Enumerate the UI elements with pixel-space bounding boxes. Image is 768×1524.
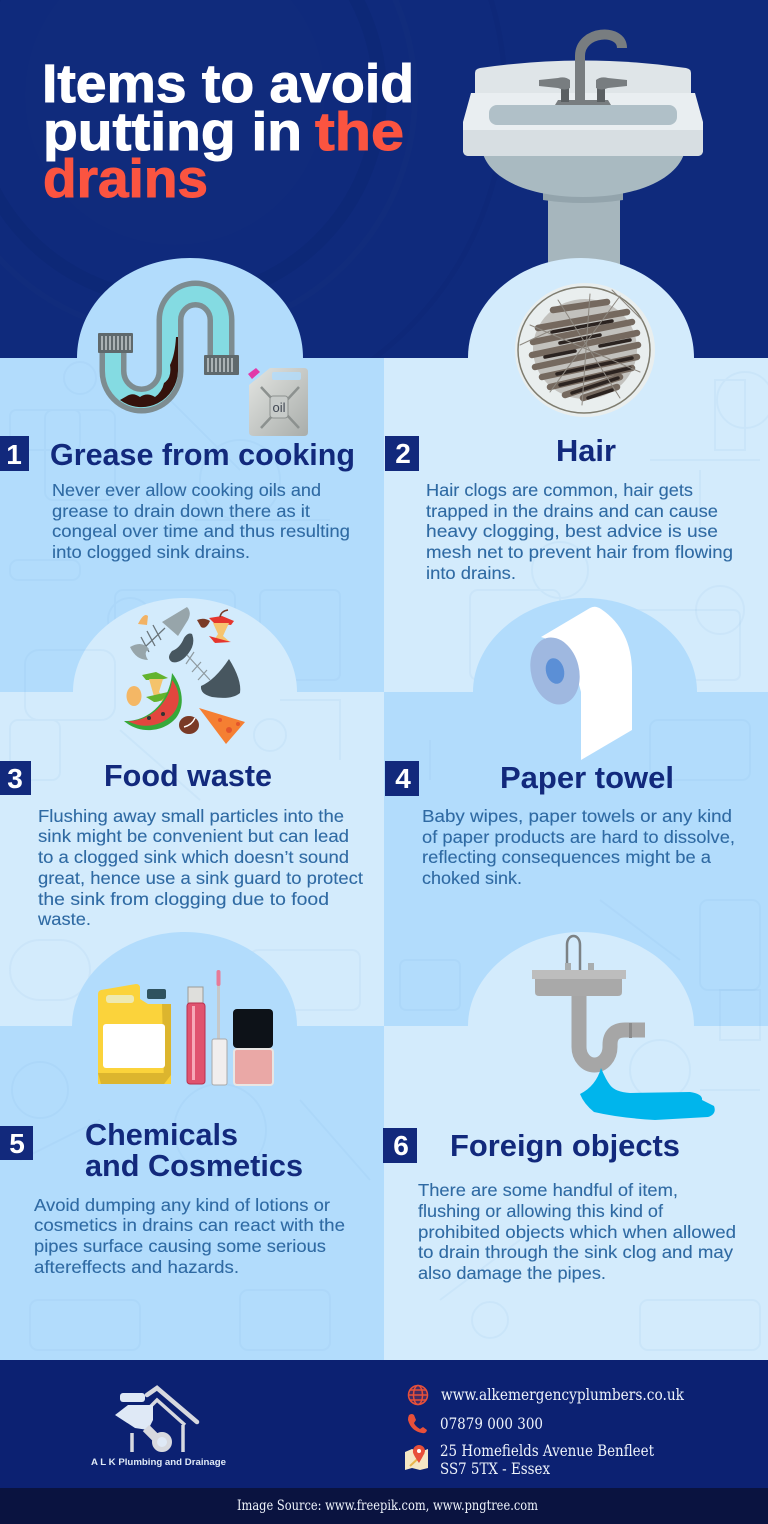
body text: There are some handful of item,: [418, 1180, 678, 1200]
heading: Hair: [556, 434, 616, 468]
image source bar: [0, 1488, 768, 1524]
body text: [426, 480, 733, 583]
body text: [34, 1195, 345, 1277]
panel: grease from cooking: [0, 258, 384, 692]
title: putting in: [43, 102, 302, 162]
body text: also damage the pipes.: [418, 1263, 606, 1283]
body text: Never ever allow cooking oils and: [52, 480, 321, 500]
body text: flushing or allowing this kind of: [418, 1201, 663, 1221]
number 6: [383, 1128, 417, 1163]
number 6: 6: [393, 1130, 409, 1161]
website: www.alkemergencyplumbers.co.uk: [441, 1386, 685, 1404]
number 5: 5: [9, 1128, 25, 1159]
heading: and Cosmetics: [85, 1149, 303, 1183]
logo: [91, 1388, 226, 1468]
panel: foreign objects: [383, 932, 768, 1360]
body text: heavy clogging, best advice is use: [426, 521, 718, 541]
panel: paper towel: [384, 586, 768, 1026]
number 1: 1: [6, 439, 22, 470]
body text: pipes surface causing some serious: [34, 1236, 326, 1256]
body text: [418, 1180, 736, 1283]
number 3: [0, 761, 31, 795]
icon: map pin: [405, 1445, 428, 1470]
body text: Flushing away small particles into the: [38, 806, 344, 826]
body text: choked sink.: [422, 868, 522, 888]
arch and food icons: [10, 598, 360, 1010]
body text: congeal over time and thus resulting: [52, 521, 350, 541]
body text: of paper products are hard to dissolve,: [422, 827, 735, 847]
body text: aftereffects and hazards.: [34, 1257, 239, 1277]
title: the: [315, 102, 404, 162]
body text: trapped in the drains and can cause: [426, 501, 718, 521]
body text: into drains.: [426, 563, 516, 583]
image source bar: Image Source: www.freepik.com, www.pngtree.com: [237, 1498, 538, 1514]
footer: [0, 1360, 768, 1489]
logo: A L K Plumbing and Drainage: [91, 1457, 226, 1468]
heading: Grease from cooking: [50, 438, 355, 472]
number 5: [0, 1126, 33, 1160]
number 2: 2: [395, 438, 411, 469]
header background: [0, 0, 768, 425]
body text: the sink from clogging due to food: [38, 889, 329, 909]
heading: Foreign objects: [450, 1129, 680, 1163]
address: [440, 1442, 655, 1478]
phone number: 07879 000 300: [440, 1415, 543, 1433]
arch and roll icon: [400, 586, 760, 1010]
title: Items to avoid: [42, 54, 414, 114]
panel: food waste: [0, 598, 384, 1026]
address: 25 Homefields Avenue Benfleet: [440, 1442, 655, 1460]
heading: [85, 1118, 303, 1183]
arch and drain icon: [468, 258, 768, 680]
body text: prohibited objects which when allowed: [418, 1222, 736, 1242]
body text: reflecting consequences might be a: [422, 847, 711, 867]
body text: [52, 480, 350, 562]
body text: to a clogged sink which doesn’t sound: [38, 847, 349, 867]
arch and icons: [10, 258, 340, 690]
arch and cosmetics icons: [12, 932, 370, 1350]
body text: waste.: [37, 909, 91, 929]
panel: hair: [384, 258, 768, 692]
body text: to drain through the sink clog and may: [418, 1242, 733, 1262]
heading: Paper towel: [500, 761, 674, 795]
panel: chemicals and cosmetics: [0, 932, 384, 1360]
icon: globe: [408, 1386, 428, 1404]
body text: cosmetics in drains can react with the: [34, 1215, 345, 1235]
arch and icons: oil: [272, 400, 286, 415]
body text: mesh net to prevent hair from flowing: [426, 542, 733, 562]
body text: great, hence use a sink guard to protect: [38, 868, 363, 888]
number 4: 4: [395, 763, 411, 794]
body text: [422, 806, 735, 888]
body text: Baby wipes, paper towels or any kind: [422, 806, 732, 826]
number 3: 3: [7, 763, 23, 794]
heading: Food waste: [104, 759, 272, 793]
body text: Hair clogs are common, hair gets: [426, 480, 693, 500]
body text: sink might be convenient but can lead: [38, 826, 349, 846]
address: SS7 5TX - Essex: [440, 1460, 550, 1478]
title: [42, 54, 414, 209]
body text: Avoid dumping any kind of lotions or: [34, 1195, 330, 1215]
heading: Chemicals: [85, 1118, 238, 1152]
number 2: [385, 436, 419, 471]
title: drains: [43, 149, 208, 209]
body text: grease to drain down there as it: [52, 501, 310, 521]
body text: into clogged sink drains.: [52, 542, 250, 562]
icon: phone: [408, 1414, 427, 1433]
body text: [37, 806, 363, 929]
number 1: [0, 436, 29, 471]
illustration: pedestal sink: [463, 35, 703, 265]
arch and leaking sink icon: [440, 932, 760, 1350]
number 4: [385, 761, 419, 796]
